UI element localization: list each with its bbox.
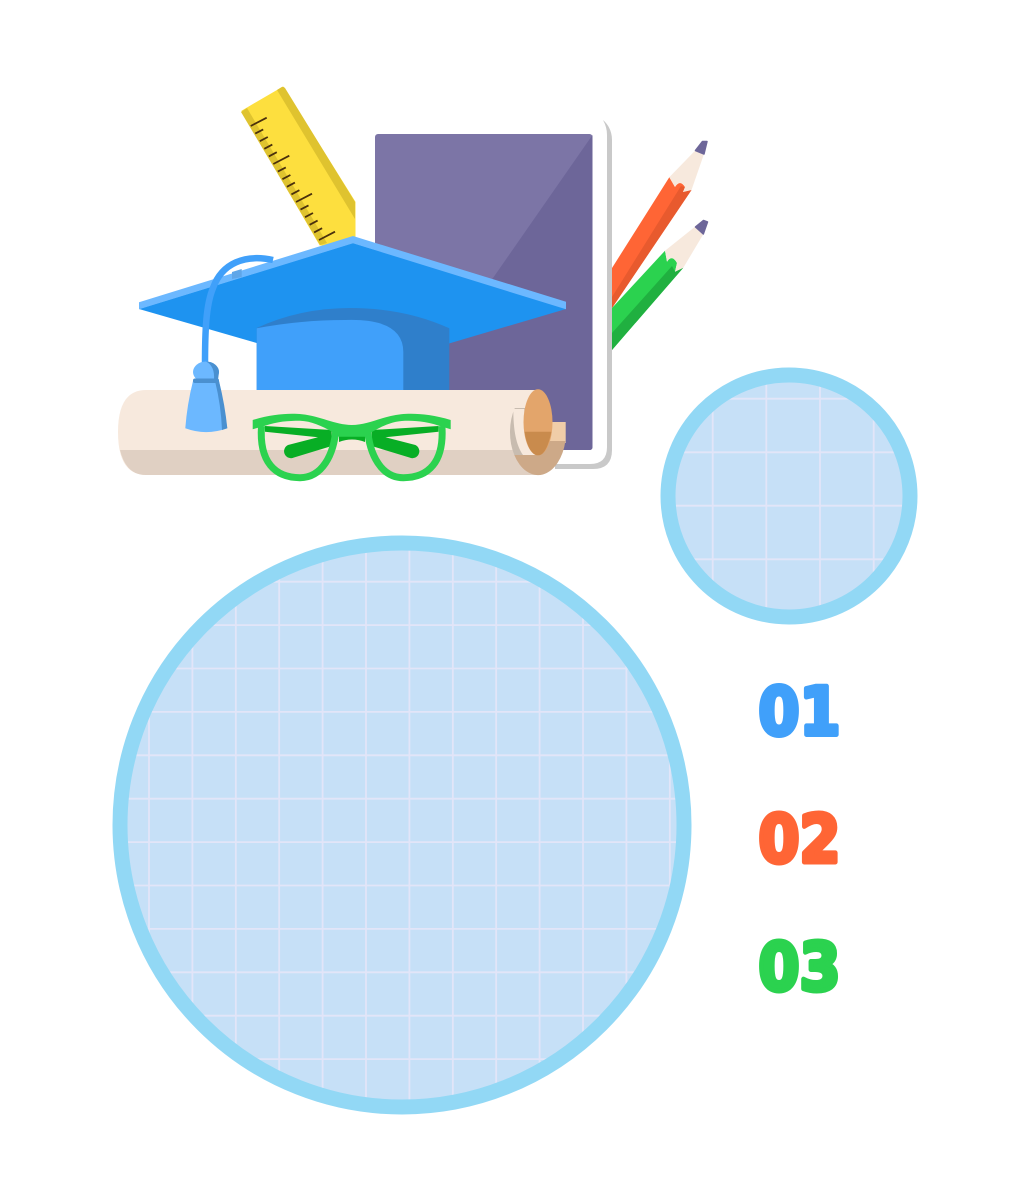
panel: small grid circle bbox=[660, 370, 918, 622]
icon: green glasses bbox=[253, 414, 451, 478]
panel: large grid circle bbox=[106, 540, 695, 1110]
icon: green pencil bbox=[612, 220, 708, 350]
icon: orange pencil bbox=[612, 142, 707, 308]
book bbox=[375, 120, 612, 469]
number 03: 03 bbox=[758, 929, 840, 1006]
scroll bbox=[118, 389, 566, 475]
icon: ruler bbox=[241, 87, 355, 245]
number 02: 02 bbox=[758, 801, 840, 878]
icon: tassel bbox=[185, 362, 227, 432]
icon: graduation cap bbox=[139, 236, 566, 391]
number 01: 01 bbox=[758, 674, 840, 750]
